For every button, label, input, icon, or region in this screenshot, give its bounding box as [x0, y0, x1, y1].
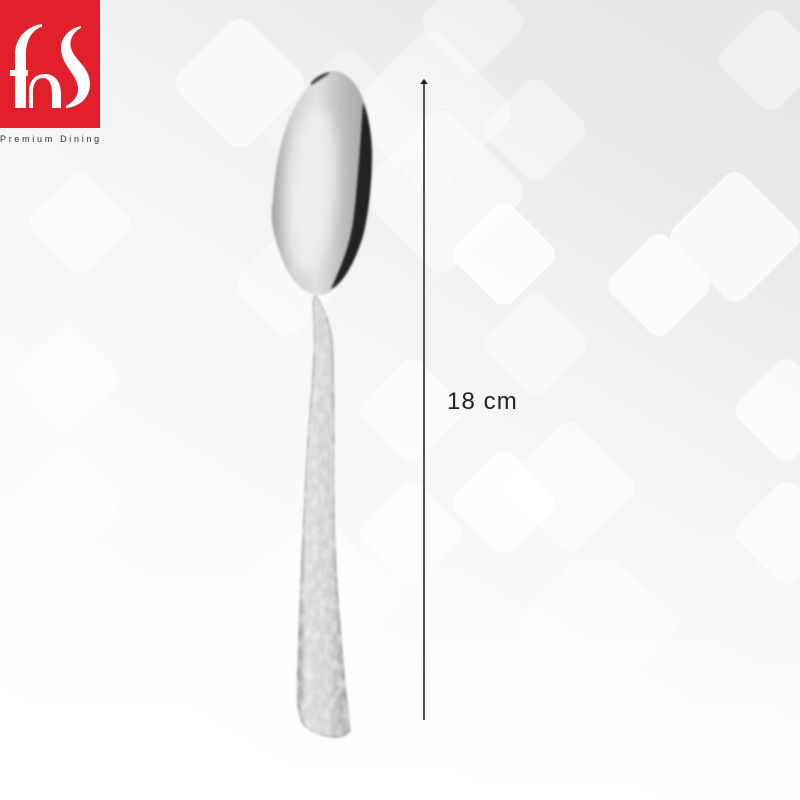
measurement arrow [421, 80, 427, 720]
bowl dark reflection [331, 103, 372, 289]
spoon handle [298, 294, 350, 737]
spoon bowl [272, 71, 372, 295]
spoon illustration [272, 71, 372, 737]
bowl top shadow [310, 72, 331, 85]
logo: FnS Premium Dining [0, 0, 102, 144]
logo letters fnS [10, 24, 90, 108]
measurement label: 18 cm [447, 388, 518, 415]
logo red square [0, 0, 100, 128]
logo tagline: Premium Dining [0, 134, 102, 144]
